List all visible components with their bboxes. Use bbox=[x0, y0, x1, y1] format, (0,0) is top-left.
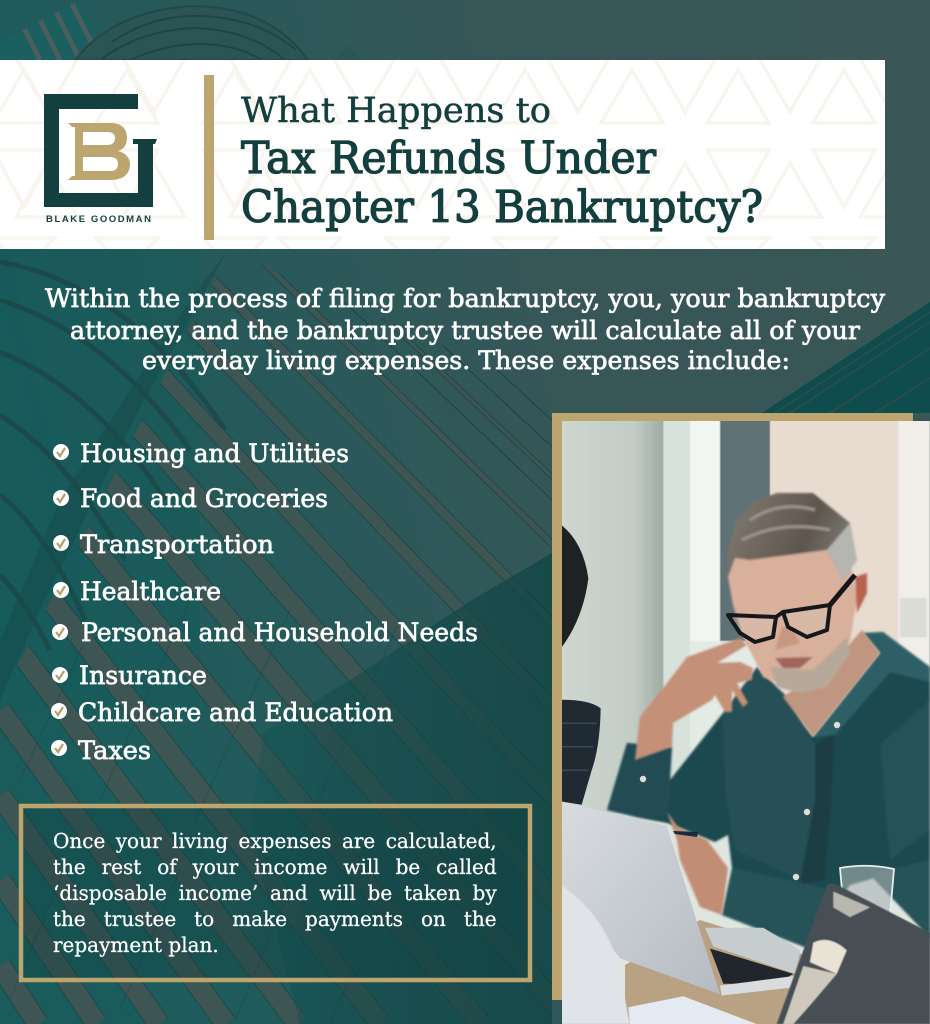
dark tower lower right bbox=[250, 553, 552, 1024]
shirt buttons bbox=[640, 722, 840, 880]
gold divider bbox=[204, 75, 214, 240]
logo: Blake Goodman: BLAKE GOODMAN bbox=[46, 214, 151, 225]
right tower bbox=[762, 302, 930, 413]
banner triangle pattern bbox=[0, 60, 885, 249]
list item: Healthcare: Healthcare bbox=[80, 577, 221, 606]
facade stripes bbox=[0, 250, 620, 1024]
callout box: disposable income: repayment plan. bbox=[53, 933, 219, 957]
dark arcs bbox=[0, 262, 225, 650]
water glass bbox=[840, 866, 894, 915]
title: Chapter 13 Bankruptcy? bbox=[241, 182, 763, 233]
list item: Insurance: Insurance bbox=[79, 661, 207, 690]
gold photo frame bbox=[552, 413, 913, 1000]
header banner bbox=[0, 60, 885, 249]
intro paragraph: Within the process of filing for bankruptcy, you, your bankruptcy bbox=[45, 284, 886, 314]
laptop and papers bbox=[562, 802, 801, 1024]
neck bbox=[783, 630, 880, 737]
shirt bbox=[607, 632, 930, 948]
foreground grey laptop bbox=[777, 883, 930, 1024]
title: What Happens to bbox=[241, 91, 551, 131]
list item: Childcare and Education: Childcare and Education bbox=[78, 698, 393, 727]
list item: Housing and Utilities: Housing and Utilities bbox=[80, 439, 349, 468]
intro paragraph bbox=[45, 284, 886, 376]
head bbox=[727, 493, 867, 693]
intro paragraph: attorney, and the bankruptcy trustee will calculate all of your bbox=[70, 316, 861, 346]
callout box: disposable income: the trustee to make payments on the bbox=[53, 907, 497, 931]
list item: Taxes: Taxes bbox=[78, 736, 151, 765]
title bbox=[241, 91, 763, 233]
callout box: disposable income bbox=[21, 806, 530, 980]
callout box: disposable income: Once your living expenses are calculated, bbox=[53, 829, 497, 853]
callout box: disposable income: the rest of your income will be called bbox=[53, 855, 497, 879]
pen hand bbox=[667, 812, 728, 915]
title: Tax Refunds Under bbox=[241, 133, 657, 184]
office backdrop bbox=[560, 418, 930, 1024]
photo: man at laptop bbox=[560, 418, 930, 1024]
expense checklist bbox=[51, 439, 478, 765]
logo: Blake Goodman bbox=[44, 94, 157, 225]
list item: Food and Groceries: Food and Groceries bbox=[80, 484, 328, 513]
list item: Personal and Household Needs: Personal and Household Needs bbox=[81, 618, 478, 647]
callout box: disposable income: ‘disposable income’ and will be taken by bbox=[53, 881, 497, 905]
table bbox=[625, 920, 930, 1024]
intro paragraph: everyday living expenses. These expenses include: bbox=[142, 346, 790, 376]
pen bbox=[673, 831, 698, 837]
list item: Transportation: Transportation bbox=[80, 530, 274, 559]
glasses bbox=[728, 575, 855, 642]
raised hand bbox=[635, 638, 753, 760]
